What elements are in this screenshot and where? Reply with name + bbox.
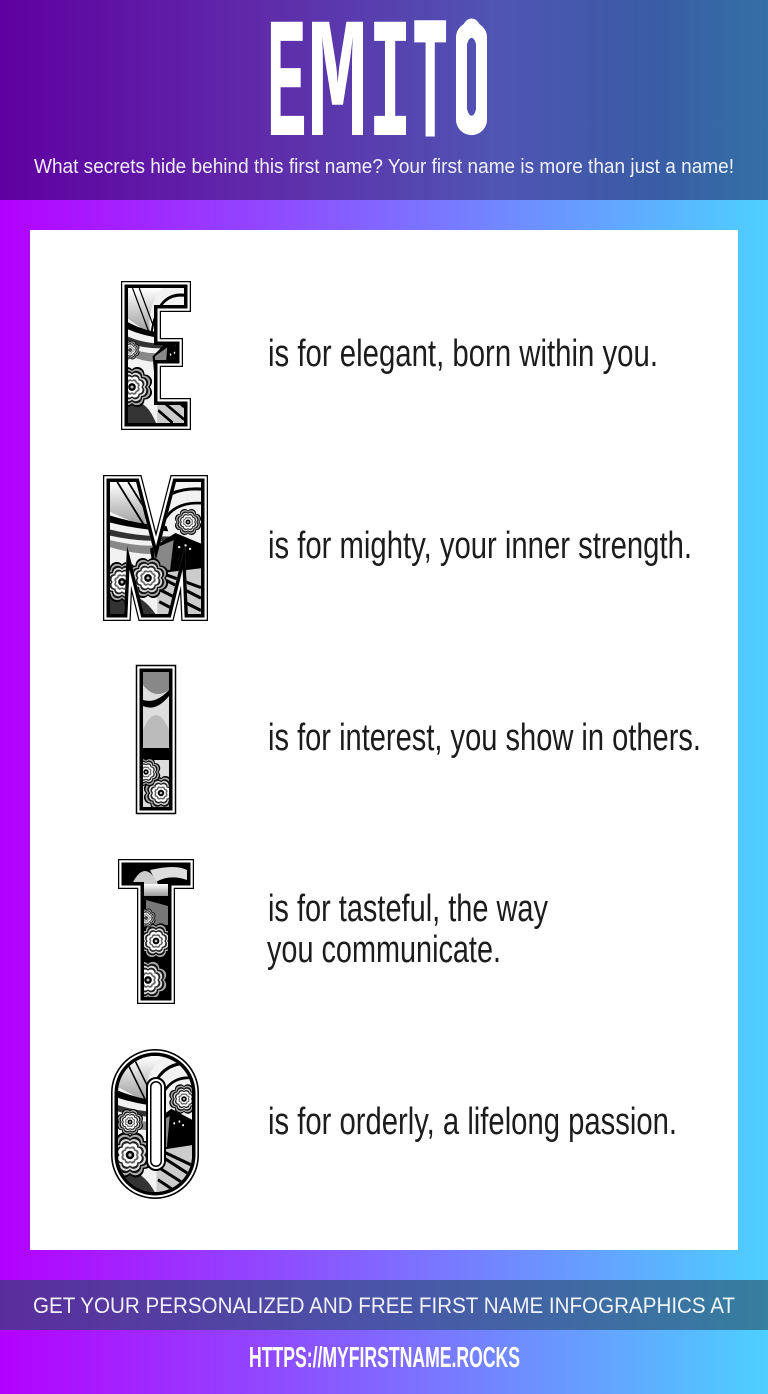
header band: [0, 0, 768, 200]
footer url: HTTPS://MYFIRSTNAME.ROCKS: [249, 1342, 520, 1374]
icon: decorative letter M: [102, 482, 201, 614]
footer band: [0, 1280, 768, 1330]
text: T line: you communicate.: [267, 929, 501, 971]
text: T line: [267, 888, 548, 971]
icon: decorative letter E: [112, 288, 184, 423]
footer call to action: GET YOUR PERSONALIZED AND FREE FIRST NAME INFOGRAPHICS AT: [33, 1293, 735, 1318]
text: T line: is for tasteful, the way: [268, 888, 548, 930]
title: [266, 0, 489, 188]
text: E line: is for elegant, born within you.: [268, 333, 658, 375]
icon: decorative letter O: [108, 1050, 199, 1198]
icon: decorative letter I: [132, 666, 178, 814]
white content panel: [30, 230, 738, 1250]
icon: decorative letter T: [125, 866, 187, 1000]
subtitle: What secrets hide behind this first name? Your first name is more than just a name!: [34, 156, 734, 178]
